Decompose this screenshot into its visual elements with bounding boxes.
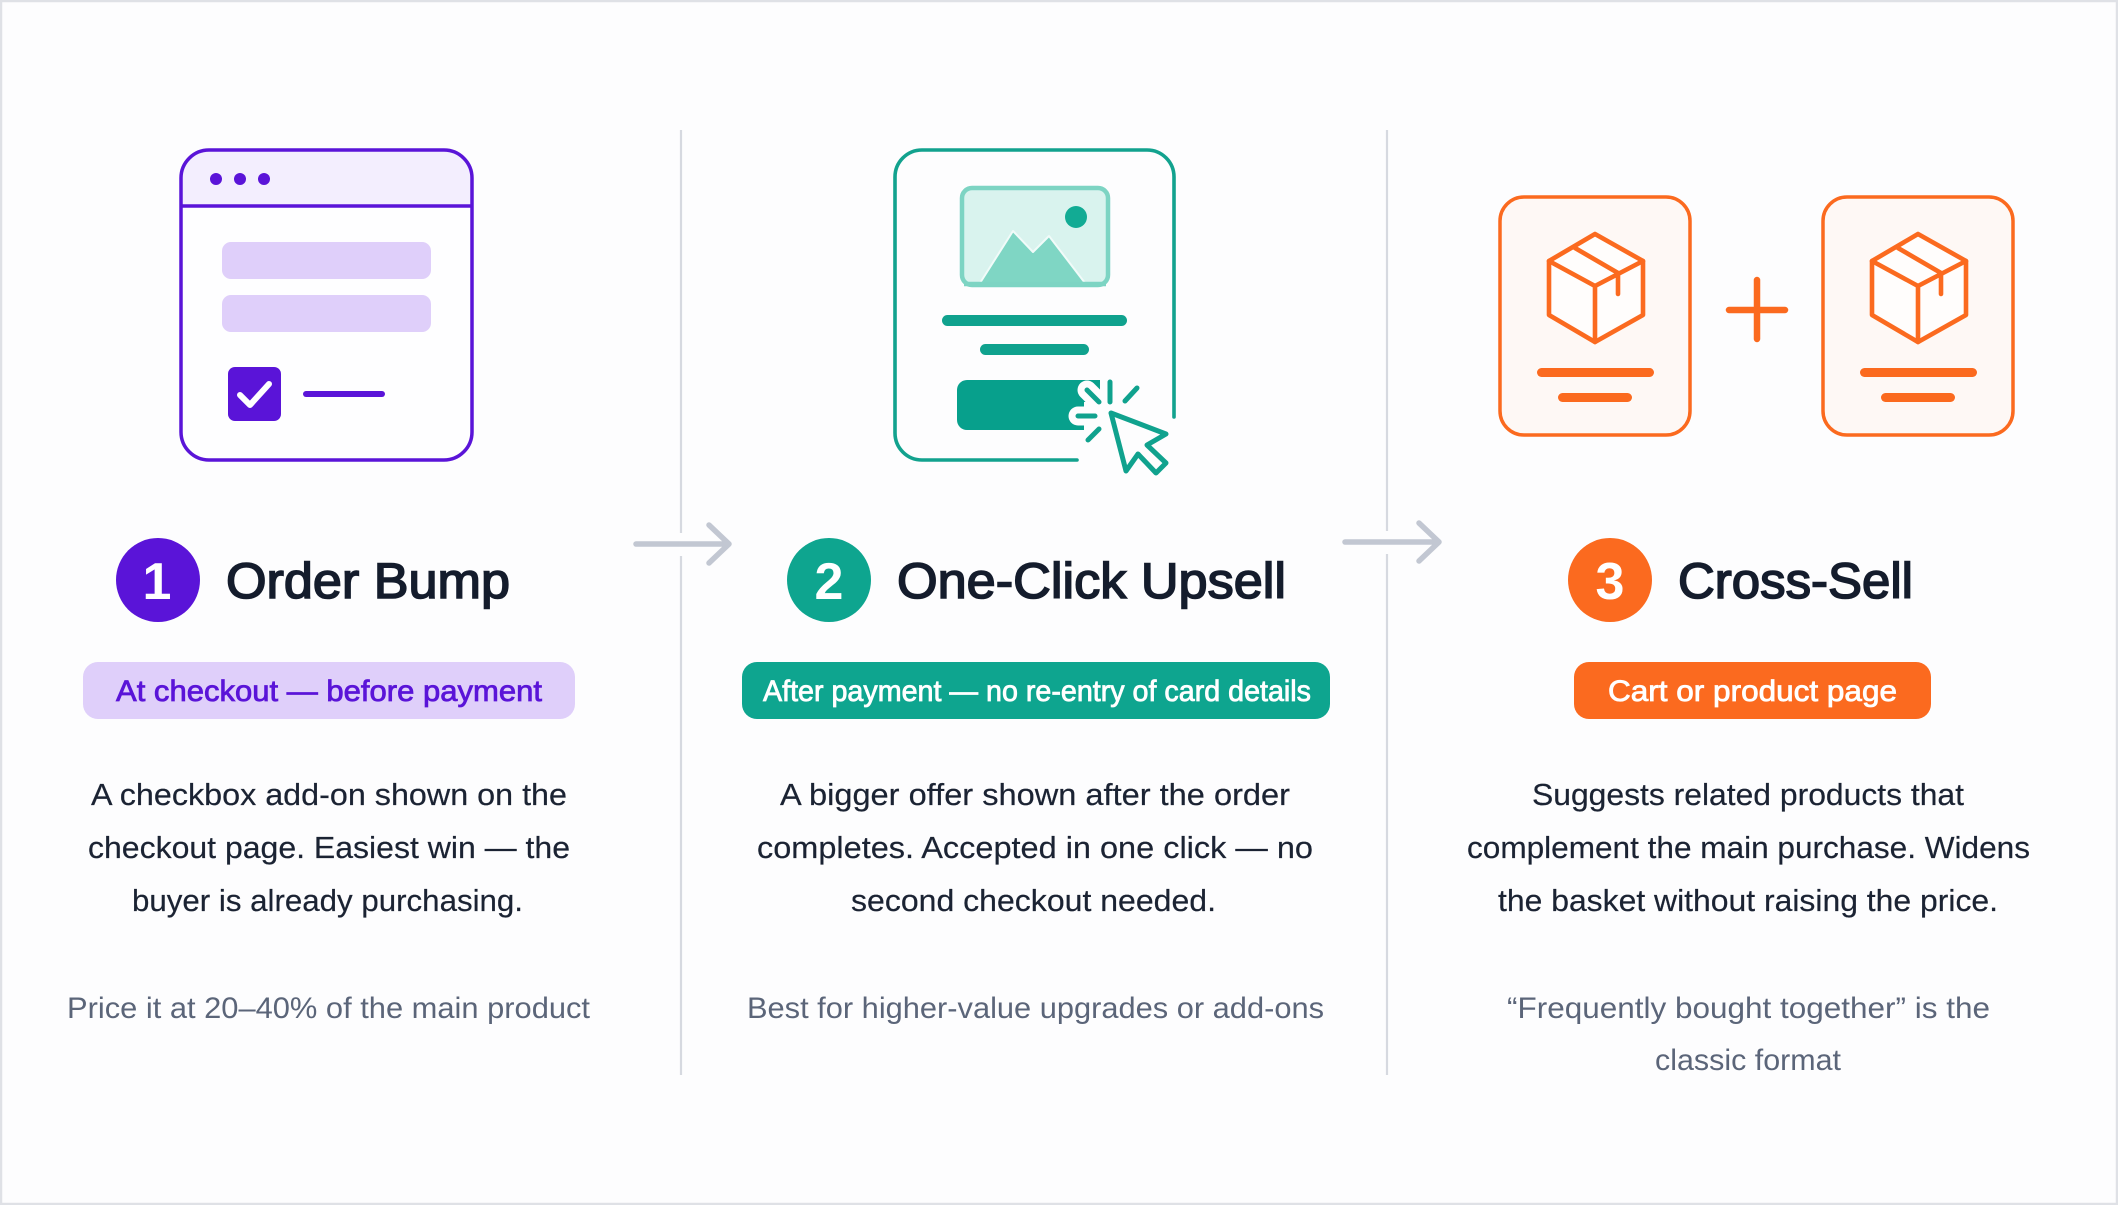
tip text: Price it at 20–40% of the main product bbox=[67, 992, 591, 1025]
timing pill: after payment: After payment — no re-entry of card details bbox=[763, 675, 1311, 708]
tip text: “Frequently bought together” is the bbox=[1507, 992, 1990, 1025]
description text: Suggests related products that bbox=[1532, 777, 1964, 812]
number badge 2: 2 bbox=[815, 553, 843, 611]
description text: buyer is already purchasing. bbox=[132, 883, 523, 918]
number badge 3: 3 bbox=[1596, 553, 1624, 611]
heading: cross-sell: Cross-Sell bbox=[1678, 553, 1913, 609]
description text bbox=[88, 777, 570, 918]
heading: order bump: Order Bump bbox=[226, 553, 510, 609]
timing pill: cart or product page bbox=[1574, 662, 1931, 719]
icon: browser window with checkbox bbox=[181, 150, 472, 460]
description text bbox=[757, 777, 1313, 918]
panel: cross-sell bbox=[1467, 197, 2030, 1077]
description text: completes. Accepted in one click — no bbox=[757, 830, 1313, 865]
tip text bbox=[1507, 992, 1990, 1077]
heading: one-click upsell: One-Click Upsell bbox=[897, 553, 1286, 609]
description text: A checkbox add-on shown on the bbox=[91, 777, 567, 812]
panel: one-click upsell bbox=[742, 150, 1330, 1025]
arrow: order bump to upsell bbox=[636, 525, 729, 563]
icon: two product cards with plus bbox=[1500, 197, 2013, 435]
tip text: classic format bbox=[1655, 1044, 1842, 1077]
number badge 2 bbox=[787, 538, 871, 622]
description text: checkout page. Easiest win — the bbox=[88, 830, 570, 865]
timing pill: after payment bbox=[742, 662, 1330, 719]
product card right bbox=[1823, 197, 2013, 435]
number badge 3 bbox=[1568, 538, 1652, 622]
number badge 1: 1 bbox=[143, 553, 171, 611]
description text: complement the main purchase. Widens bbox=[1467, 830, 2030, 865]
description text: the basket without raising the price. bbox=[1498, 883, 1998, 918]
timing pill: cart or product page: Cart or product page bbox=[1608, 675, 1897, 708]
tip text: Best for higher-value upgrades or add-ons bbox=[747, 992, 1324, 1025]
description text: A bigger offer shown after the order bbox=[780, 777, 1290, 812]
number badge 1 bbox=[116, 538, 200, 622]
plus sign bbox=[1729, 280, 1785, 339]
timing pill: at checkout bbox=[83, 662, 575, 719]
product card left bbox=[1500, 197, 1690, 435]
timing pill: at checkout: At checkout — before payment bbox=[116, 675, 543, 708]
arrow: upsell to cross-sell bbox=[1345, 523, 1439, 561]
icon: offer page with cursor bbox=[895, 150, 1174, 473]
description text bbox=[1467, 777, 2030, 918]
panel: order bump bbox=[67, 150, 591, 1025]
description text: second checkout needed. bbox=[851, 883, 1216, 918]
